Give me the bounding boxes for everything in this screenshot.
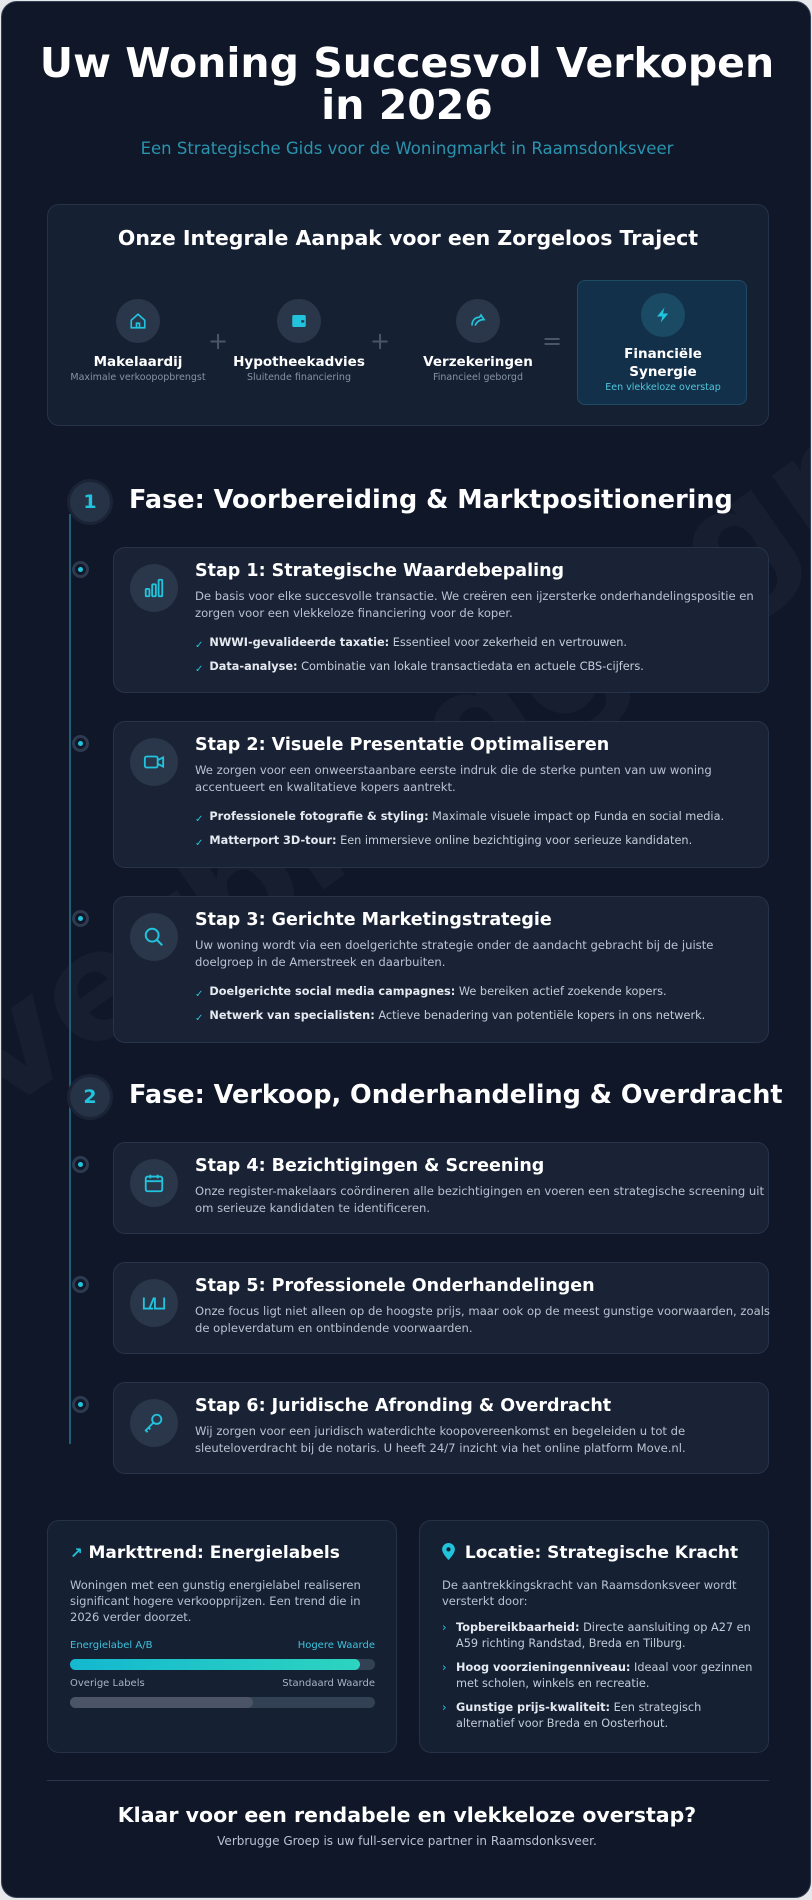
bar chart: Standaard Waarde xyxy=(282,1678,375,1689)
equals: = xyxy=(542,327,562,355)
list: Topbereikbaarheid: Directe aansluiting op A27 en A59 richting Randstad, Breda en Tilburg. xyxy=(456,1621,751,1650)
icon: calendar xyxy=(130,1159,178,1207)
plus: + xyxy=(208,327,228,355)
title: Uw Woning Succesvol Verkopen xyxy=(40,39,774,87)
icon: wallet xyxy=(277,299,321,343)
result: financiele synergie: Synergie xyxy=(629,364,697,380)
list: › xyxy=(442,1701,447,1714)
CTA heading: Klaar voor een rendabele en vlekkeloze overstap? xyxy=(118,1803,696,1827)
dot xyxy=(72,910,89,927)
panel: markttrend xyxy=(47,1520,397,1753)
card: stap 6: Stap 6: Juridische Afronding & Overdracht xyxy=(195,1396,611,1416)
card: stap 3: Uw woning wordt via een doelgerichte strategie onder de aandacht gebracht bij de juiste doelgroep in de Amerstreek en daarbuiten. xyxy=(195,938,713,968)
item: makelaardij xyxy=(70,299,206,383)
bar chart: Overige Labels xyxy=(70,1678,145,1689)
card: stap 6: Wij zorgen voor een juridisch waterdichte koopovereenkomst en begeleiden u tot de sleuteloverdracht bij de notaris. U heeft 24/7 inzicht via het online platform Move.nl. xyxy=(195,1424,686,1454)
list: Hoog voorzieningenniveau: Ideaal voor gezinnen met scholen, winkels en recreatie. xyxy=(456,1661,752,1690)
card: stap 2: Stap 2: Visuele Presentatie Optimaliseren xyxy=(195,735,609,755)
dot xyxy=(72,1276,89,1293)
icon: chart xyxy=(130,564,178,612)
timeline line xyxy=(69,514,71,1444)
list: › xyxy=(442,1661,447,1674)
bar chart: Hogere Waarde xyxy=(298,1640,375,1651)
dot xyxy=(72,735,89,752)
subtitle: Een Strategische Gids voor de Woningmarkt in Raamsdonksveer xyxy=(141,139,673,158)
card: stap 3 xyxy=(113,896,769,1043)
heading with icon: ↗ Markttrend: Energielabels xyxy=(70,1543,340,1563)
panel heading: Onze Integrale Aanpak voor een Zorgeloos Traject xyxy=(118,226,698,250)
item: hypotheekadvies: Hypotheekadvies xyxy=(233,354,365,370)
card: stap 2: We zorgen voor een onweerstaanbare eerste indruk die de sterke punten van uw woning accentueert en kwalitatieve kopers aantrekt. xyxy=(195,763,712,794)
icon: shield xyxy=(456,299,500,343)
card: stap 2: Professionele fotografie & styling: Maximale visuele impact op Funda en social media. xyxy=(209,810,724,823)
item: hypotheekadvies xyxy=(233,299,365,383)
icon: handshake xyxy=(130,1279,178,1327)
panel: integrale aanpak xyxy=(47,204,769,426)
phase 1 badge xyxy=(70,482,110,522)
item: makelaardij: Maximale verkoopopbrengst xyxy=(70,372,206,383)
card: stap 4: Onze register-makelaars coördineren alle bezichtigingen en voeren een strategische screening uit om serieuze kandidaten te identificeren. xyxy=(195,1184,764,1214)
card: stap 1: Stap 1: Strategische Waardebepaling xyxy=(195,561,564,581)
list: Gunstige prijs-kwaliteit: Een strategisch alternatief voor Breda en Oosterhout. xyxy=(456,1701,701,1730)
heading with icon: Locatie: Strategische Kracht xyxy=(465,1543,738,1563)
icon: bolt xyxy=(641,293,685,337)
phase 2 badge xyxy=(70,1077,110,1117)
dot xyxy=(72,1156,89,1173)
title: in 2026 xyxy=(321,81,493,129)
panel: locatie xyxy=(419,1520,769,1753)
card: stap 5 xyxy=(113,1262,769,1354)
icon: key xyxy=(130,1399,178,1447)
result: financiele synergie: Financiële xyxy=(624,346,702,362)
panel: markttrend: Woningen met een gunstig energielabel realiseren significant hogere verkoopprijzen. Een trend die in 2026 verder doorzet. xyxy=(70,1578,361,1624)
icon: search xyxy=(130,913,178,961)
card: stap 3: Doelgerichte social media campagnes: We bereiken actief zoekende kopers. xyxy=(209,985,667,998)
dot xyxy=(72,1396,89,1413)
item: verzekeringen: Verzekeringen xyxy=(423,354,533,370)
icon: house xyxy=(116,299,160,343)
item: verzekeringen xyxy=(423,299,533,383)
panel: locatie: De aantrekkingskracht van Raamsdonksveer wordt versterkt door: xyxy=(442,1578,737,1608)
card: stap 3: Stap 3: Gerichte Marketingstrategie xyxy=(195,910,552,930)
card: stap 1: Data-analyse: Combinatie van lokale transactiedata en actuele CBS-cijfers. xyxy=(209,660,644,673)
result: financiele synergie: Een vlekkeloze overstap xyxy=(605,382,721,393)
card: stap 1: NWWI-gevalideerde taxatie: Essentieel voor zekerheid en vertrouwen. xyxy=(209,636,627,649)
card: stap 1: De basis voor elke succesvolle transactie. We creëren een ijzersterke onderhandelingspositie en zorgen voor een vlekkeloze financiering voor de koper. xyxy=(195,589,754,620)
result: financiele synergie xyxy=(577,280,747,405)
phase 2 heading: Fase: Verkoop, Onderhandeling & Overdracht xyxy=(129,1080,783,1110)
card: stap 5: Stap 5: Professionele Onderhandelingen xyxy=(195,1276,595,1296)
CTA subtext: Verbrugge Groep is uw full-service partner in Raamsdonksveer. xyxy=(217,1834,597,1848)
item: hypotheekadvies: Sluitende financiering xyxy=(247,372,351,383)
item: verzekeringen: Financieel geborgd xyxy=(433,372,523,383)
plus: + xyxy=(370,327,390,355)
card: stap 2: Matterport 3D-tour: Een immersieve online bezichtiging voor serieuze kandidaten. xyxy=(209,834,692,847)
phase 1 heading: Fase: Voorbereiding & Marktpositionering xyxy=(129,485,733,515)
card: stap 5: Onze focus ligt niet alleen op de hoogste prijs, maar ook op de meest gunstige voorwaarden, zoals de opleverdatum en ontbindende voorwaarden. xyxy=(195,1304,770,1334)
bar chart xyxy=(70,1640,375,1708)
bar chart: Energielabel A/B xyxy=(70,1640,152,1651)
card: stap 2 xyxy=(113,721,769,868)
item: makelaardij: Makelaardij xyxy=(94,354,182,370)
card: stap 4: Stap 4: Bezichtigingen & Screening xyxy=(195,1156,544,1176)
dot xyxy=(72,561,89,578)
title xyxy=(40,39,774,129)
card: stap 4 xyxy=(113,1142,769,1234)
card: stap 1 xyxy=(113,547,769,693)
list xyxy=(442,1621,752,1730)
phase 2 badge: 2 xyxy=(83,1086,97,1108)
card: stap 3: Netwerk van specialisten: Actieve benadering van potentiële kopers in ons netwerk. xyxy=(209,1009,705,1022)
phase 1 badge: 1 xyxy=(83,491,97,513)
icon: video xyxy=(130,738,178,786)
list: › xyxy=(442,1621,447,1634)
card: stap 6 xyxy=(113,1382,769,1474)
